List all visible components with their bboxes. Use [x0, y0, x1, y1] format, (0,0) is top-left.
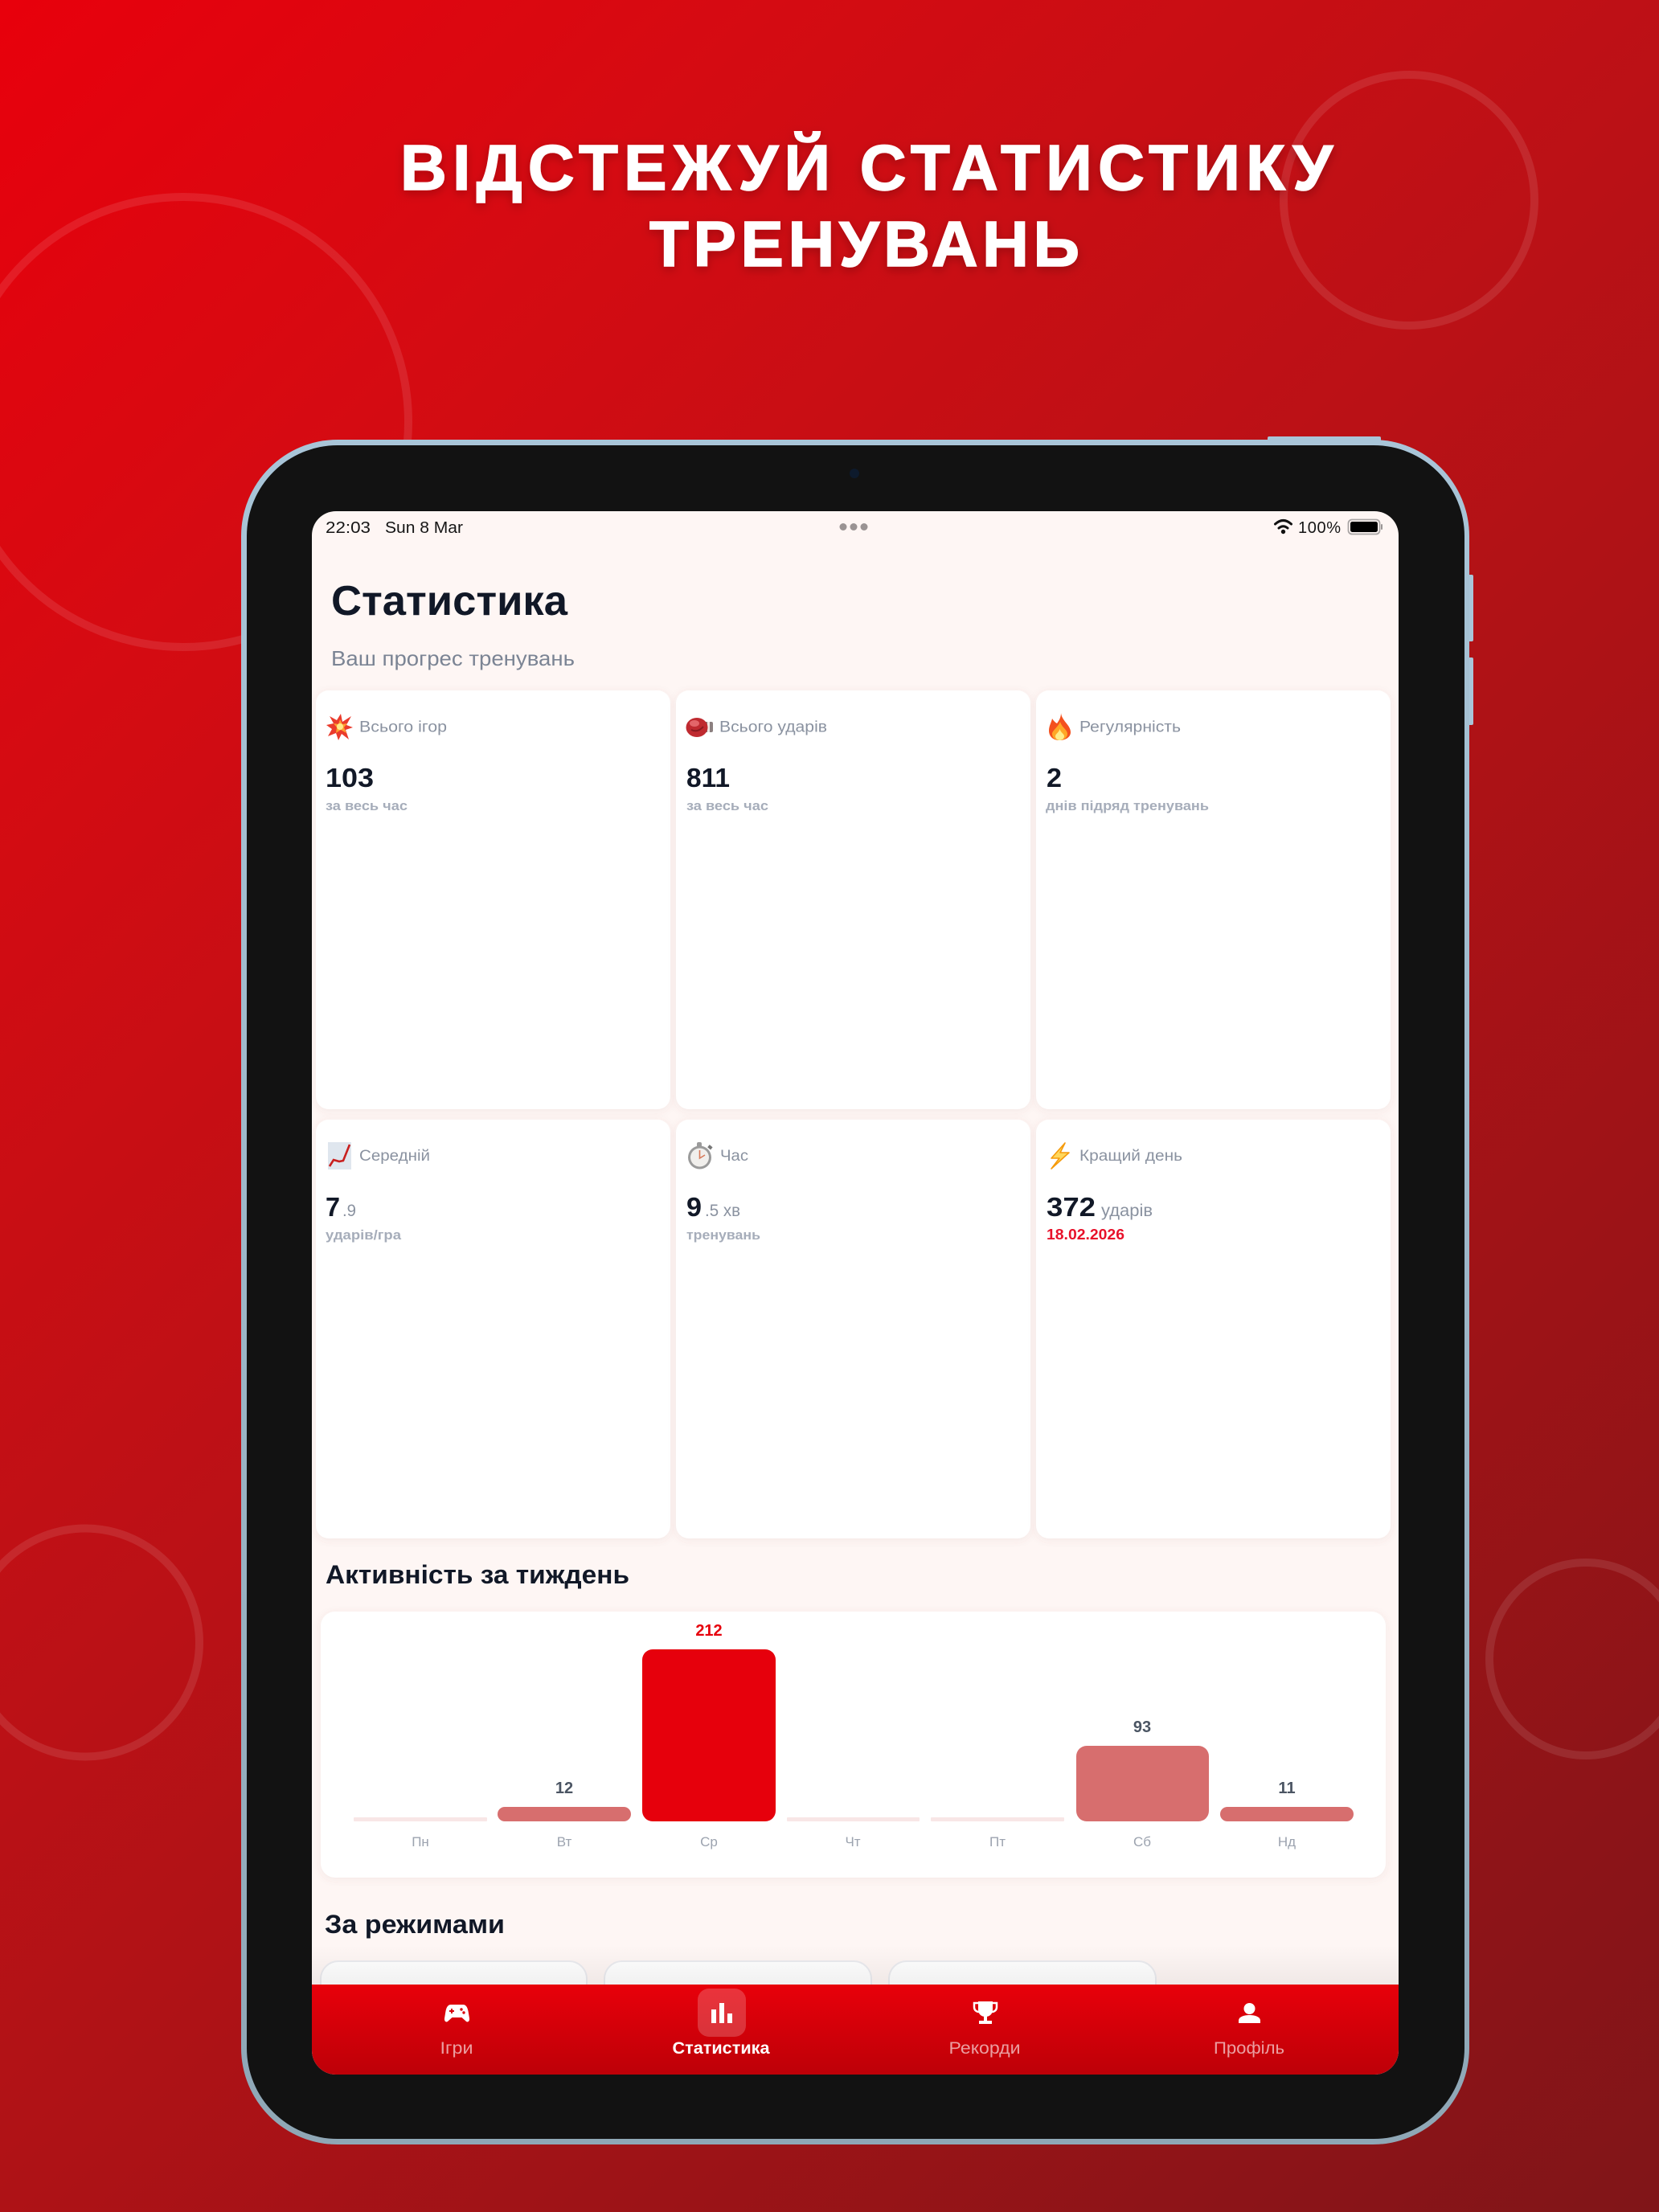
bar: Tue: 12 — [555, 1780, 573, 1797]
bar: Mon: Пн — [412, 1834, 429, 1849]
nav item: games — [440, 2005, 473, 2058]
tablet side and top buttons — [1268, 436, 1473, 725]
stat card: total games: 103 — [326, 763, 374, 793]
nav item: records: Рекорди — [948, 2039, 1021, 2058]
stat card: total punches: Всього ударів — [719, 719, 827, 736]
bar: Sat: Сб — [1133, 1834, 1151, 1849]
icon: gamepad — [444, 2005, 469, 2022]
page subheading: Ваш прогрес тренувань — [331, 646, 575, 670]
page heading: Статистика — [331, 578, 568, 625]
icon: chart — [328, 1142, 351, 1169]
stat card: total games: Всього ігор — [359, 719, 447, 736]
stat card: streak: днів підряд тренувань — [1046, 798, 1209, 813]
bar: Wed: Ср — [700, 1834, 718, 1849]
app screen — [312, 511, 1399, 2075]
icon: lightning — [1051, 1143, 1069, 1169]
stat card: average — [316, 1120, 670, 1538]
mode cards — [321, 1961, 1156, 2026]
bar chart: weekly activity — [321, 1612, 1386, 1878]
stat card: streak: 2 — [1047, 763, 1062, 793]
stat card: time — [676, 1120, 1030, 1538]
bar: Fri — [931, 1817, 1064, 1849]
nav item: games: Ігри — [440, 2039, 473, 2058]
stat card: time: Час — [720, 1148, 748, 1165]
bar: Fri: Пт — [989, 1834, 1006, 1849]
bar: Sat — [1076, 1718, 1209, 1849]
stat card: total punches: за весь час — [686, 798, 768, 813]
icon: battery — [1349, 519, 1382, 534]
icon: trophy — [974, 2001, 997, 2024]
status bar — [326, 519, 1382, 537]
icon: wifi — [1275, 521, 1291, 533]
stat card: total punches: 811 — [686, 763, 730, 793]
bar: Thu: Чт — [845, 1834, 861, 1849]
stat card: average: .9 — [342, 1202, 356, 1220]
bottom navigation — [312, 1985, 1399, 2075]
section heading: weekly activity: Активність за тиждень — [326, 1560, 629, 1589]
stat card: streak — [1036, 690, 1391, 1109]
nav item: statistics (active): Статистика — [672, 2039, 770, 2058]
bar: Thu — [787, 1817, 920, 1849]
status bar: Sun 8 Mar — [385, 519, 463, 537]
stat card: average: 7 — [326, 1192, 340, 1222]
tablet frame — [241, 440, 1469, 2144]
icon: stopwatch — [688, 1142, 713, 1169]
bar: Wed — [642, 1622, 776, 1849]
title: ВІДСТЕЖУЙ СТАТИСТИКУ — [400, 131, 1333, 203]
stat card: time: тренувань — [686, 1227, 760, 1243]
bar: Wed: 212 — [695, 1622, 723, 1640]
bar: Sun: 11 — [1278, 1780, 1296, 1797]
stat card: time: 9 — [686, 1192, 702, 1222]
icon: boxing glove — [686, 718, 713, 737]
icon: person — [1239, 2003, 1260, 2023]
camera — [850, 469, 859, 478]
status bar: 22:03 — [326, 519, 371, 537]
stat card: time: .5 хв — [705, 1202, 740, 1220]
nav item: profile: Профіль — [1214, 2039, 1284, 2058]
stat card: best day: 18.02.2026 — [1047, 1227, 1124, 1243]
stat card: average: Середній — [359, 1148, 430, 1165]
stat card: total games: за весь час — [326, 798, 408, 813]
title — [400, 131, 1333, 280]
tablet bezel — [247, 445, 1464, 2139]
bar: Tue — [498, 1780, 631, 1849]
bar: Sun: Нд — [1278, 1834, 1296, 1849]
bar: Sun — [1220, 1780, 1354, 1849]
stat card: best day: 372 — [1047, 1192, 1096, 1222]
section heading: by mode: За режимами — [325, 1910, 505, 1939]
stat card: total games — [316, 690, 670, 1109]
bar: Tue: Вт — [557, 1834, 571, 1849]
nav item: profile — [1214, 2003, 1284, 2058]
multitasking dots — [839, 523, 868, 530]
stat card: total punches — [676, 690, 1030, 1109]
stat card: best day: Кращий день — [1079, 1148, 1182, 1165]
icon: explosion — [326, 714, 353, 740]
bar: Sat: 93 — [1133, 1718, 1151, 1736]
tablet device — [241, 436, 1473, 2144]
icon: fire — [1049, 713, 1071, 740]
nav item: statistics (active) — [672, 1989, 770, 2058]
nav item: records — [948, 2001, 1021, 2058]
title: ТРЕНУВАНЬ — [649, 208, 1079, 280]
stat card: streak: Регулярність — [1079, 719, 1181, 736]
decorative circles — [0, 75, 1659, 1757]
bar: Mon — [354, 1817, 487, 1849]
stat card: best day — [1036, 1120, 1391, 1538]
stat card: best day: ударів — [1101, 1202, 1153, 1220]
status bar: 100% — [1298, 519, 1341, 537]
icon: bars — [711, 2003, 732, 2023]
stat card: average: ударів/гра — [326, 1227, 402, 1243]
